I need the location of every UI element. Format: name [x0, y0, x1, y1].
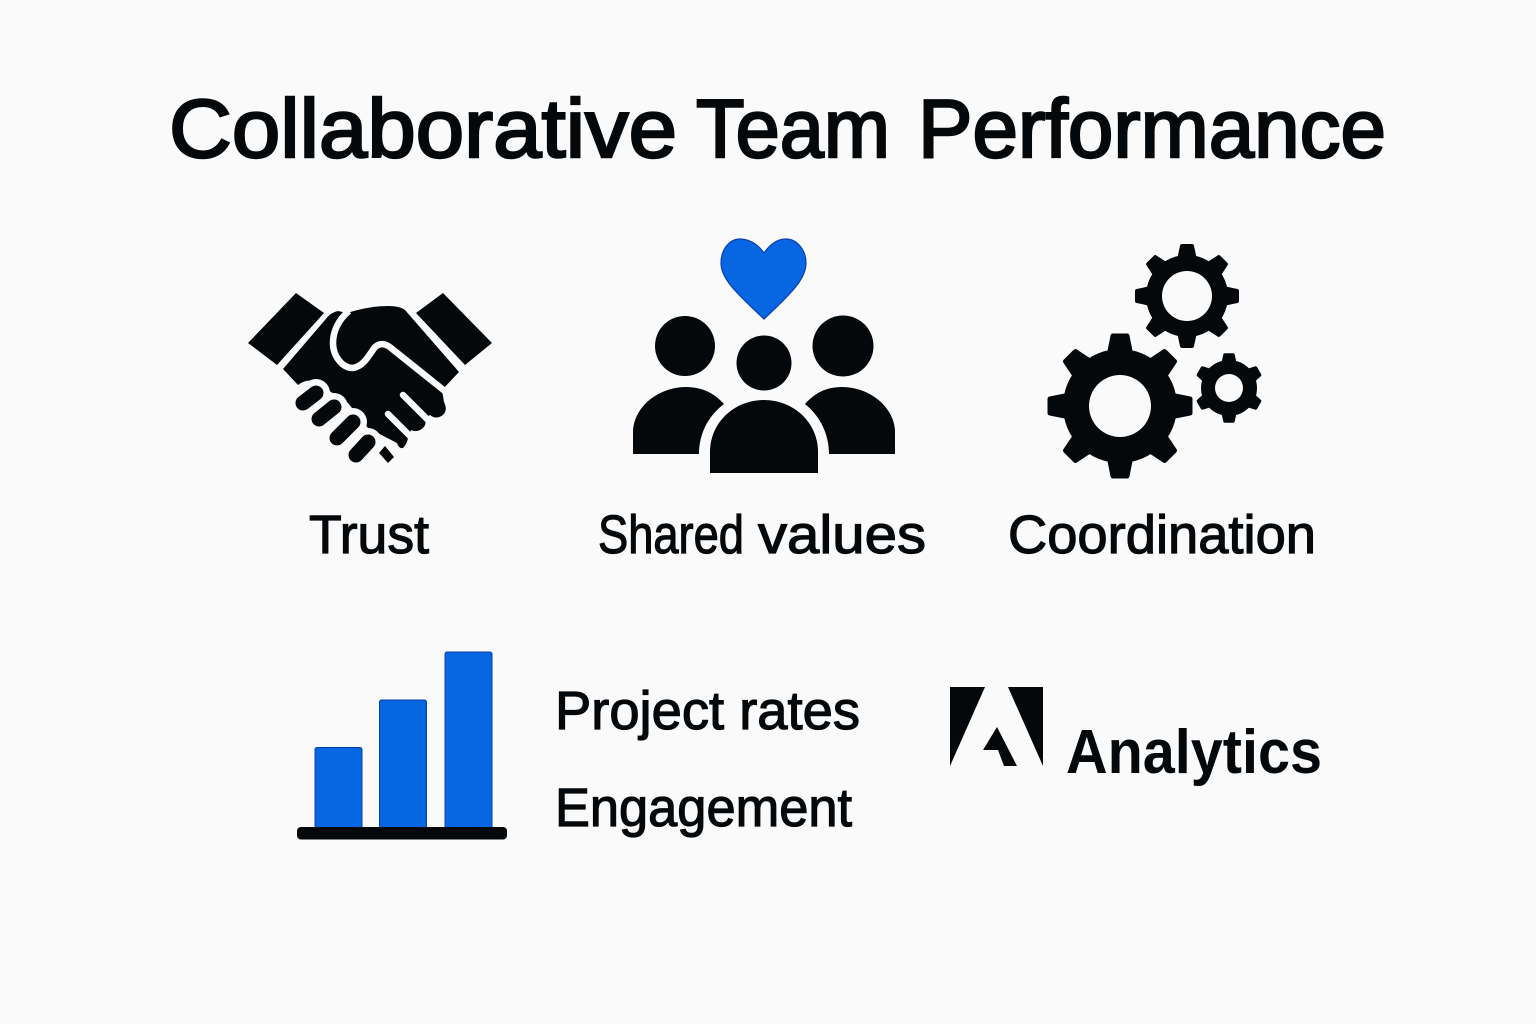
label: shared values: values	[758, 505, 926, 565]
icon: team of three	[633, 316, 895, 473]
right cuff	[416, 293, 492, 365]
panel: metrics	[297, 652, 860, 840]
bar: short	[315, 748, 362, 830]
bar: medium	[380, 700, 426, 829]
label: project rates: Project rates	[555, 681, 860, 741]
chart baseline	[297, 827, 507, 840]
panel: analytics	[950, 687, 1322, 787]
bar chart	[297, 652, 507, 840]
title: Performance	[918, 82, 1386, 175]
label: trust: Trust	[309, 505, 429, 565]
panel: trust	[248, 293, 492, 565]
label: shared values	[598, 505, 926, 565]
label: engagement: Engagement	[555, 778, 852, 838]
clasped hands	[283, 306, 459, 448]
title: Collaborative	[169, 82, 677, 175]
icon: large gear	[1050, 336, 1190, 476]
panel: shared values	[598, 239, 926, 565]
finger gaps	[388, 395, 434, 444]
left fingers	[303, 393, 368, 455]
label: coordination: Coordination	[1008, 505, 1316, 565]
left cuff	[248, 293, 324, 365]
icon: logo mark	[950, 687, 1043, 766]
panel: coordination	[1008, 246, 1316, 565]
title: Team	[696, 82, 890, 175]
icon: handshake	[248, 293, 492, 463]
bar: tall	[445, 652, 492, 829]
label: analytics: Analytics	[1066, 718, 1322, 787]
label: shared values: Shared	[598, 505, 744, 565]
icon: upper gear	[1137, 246, 1237, 346]
title	[169, 82, 1386, 175]
icon: heart	[721, 239, 806, 319]
left finger halos	[303, 393, 368, 455]
icon: small gear	[1197, 355, 1261, 421]
hand outline gap	[333, 311, 446, 392]
